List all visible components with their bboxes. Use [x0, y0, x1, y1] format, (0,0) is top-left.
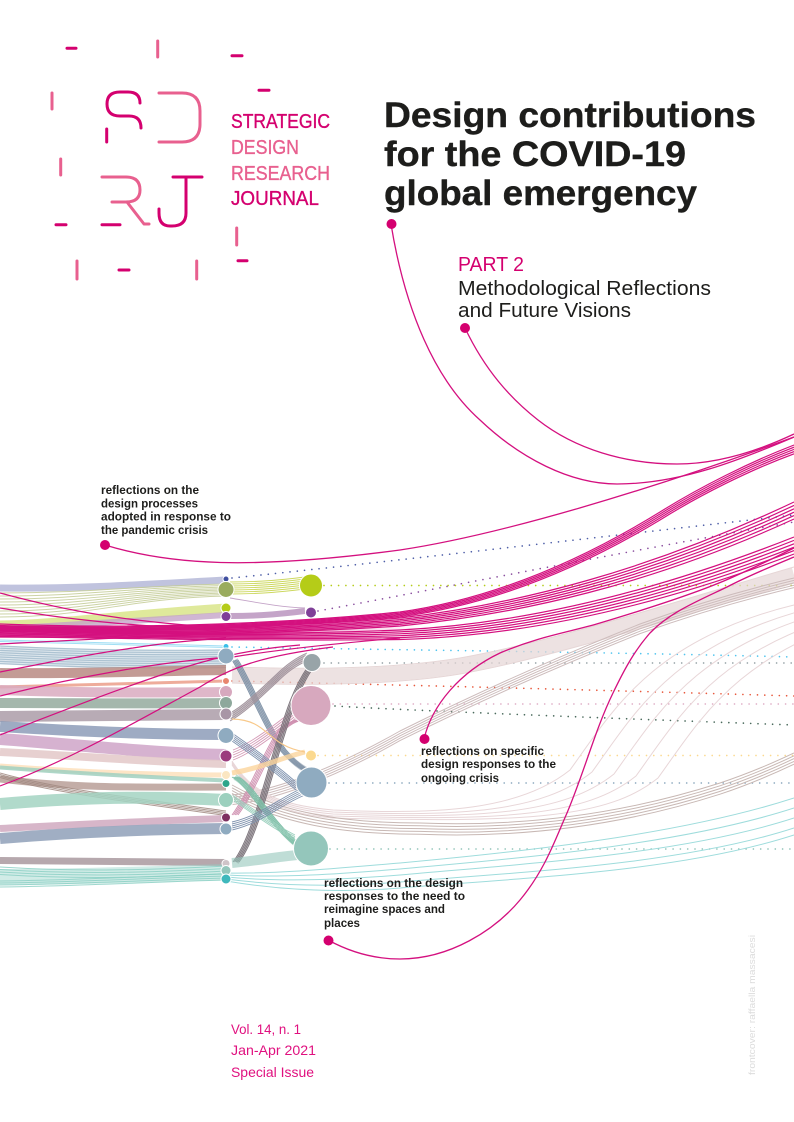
network nodes: [218, 574, 331, 884]
annotation: specific responses: ongoing crisis: [421, 773, 499, 785]
curve: spaces and places connector: [324, 557, 794, 959]
subtitle: PART 2: [458, 254, 524, 276]
title: global emergency: [384, 174, 698, 213]
annotation: spaces and places: reflections on the design: [324, 878, 463, 890]
cover credit: frontcover: raffaella massacesi: [747, 935, 758, 1075]
annotation: design processes: [101, 485, 231, 537]
curve: part 2 connector: [460, 323, 794, 464]
flow bundles: left side: [0, 580, 226, 887]
journal name: [231, 111, 330, 210]
issue details: Vol. 14, n. 1: [231, 1021, 301, 1037]
annotation: spaces and places: [324, 878, 465, 930]
curve: design processes connector: [100, 437, 794, 563]
subtitle: and Future Visions: [458, 300, 631, 322]
annotation: spaces and places: reimagine spaces and: [324, 904, 445, 916]
annotation: spaces and places: places: [324, 918, 360, 930]
annotation: design processes: the pandemic crisis: [101, 525, 208, 537]
title: [384, 96, 756, 213]
journal name: STRATEGIC: [231, 111, 330, 133]
journal name: JOURNAL: [231, 188, 319, 210]
annotation: design processes: reflections on the: [101, 485, 199, 497]
issue details: [231, 1021, 316, 1080]
flow bundles: right side: [226, 567, 794, 890]
curve: specific responses connector: [420, 548, 794, 744]
annotation: design processes: adopted in response to: [101, 512, 231, 524]
annotation: specific responses: [421, 746, 556, 785]
title: for the COVID-19: [384, 135, 686, 174]
journal name: RESEARCH: [231, 163, 330, 185]
annotation: design processes: design processes: [101, 498, 198, 510]
subtitle: Methodological Reflections: [458, 278, 711, 300]
subtitle: [458, 254, 711, 322]
journal name: DESIGN: [231, 137, 299, 159]
logo: SDRJ monogram: [52, 41, 269, 279]
issue details: Special Issue: [231, 1064, 314, 1080]
annotation: specific responses: design responses to the: [421, 759, 556, 771]
issue details: Jan-Apr 2021: [231, 1042, 316, 1058]
annotation: spaces and places: responses to the need to: [324, 891, 465, 903]
dotted lines from nodes: [232, 515, 794, 849]
magenta flow lines: [0, 445, 794, 786]
annotation: specific responses: reflections on specific: [421, 746, 545, 758]
curve: title connector: [386, 219, 794, 484]
flow bundles: centre crossings: [230, 577, 313, 863]
title: Design contributions: [384, 96, 756, 135]
